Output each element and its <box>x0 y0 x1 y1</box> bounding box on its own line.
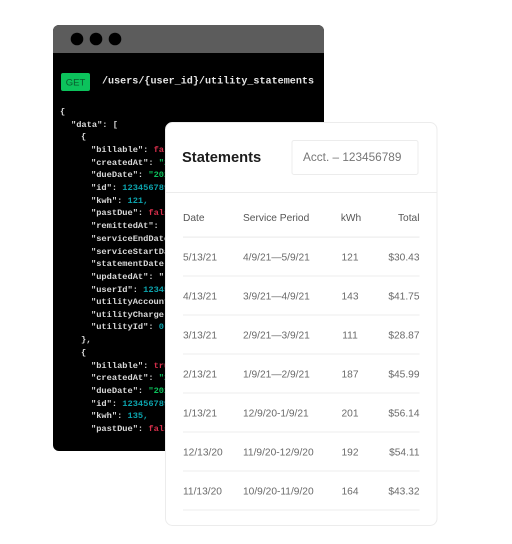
JSON code block: "dueDate": "2021 <box>91 386 174 396</box>
row 11/13/20: $43.32 <box>388 486 420 498</box>
row 11/13/20: 10/9/20-11/9/20 <box>243 486 314 498</box>
JSON code block: "dueDate": "2021 <box>91 170 174 180</box>
heading: Statements <box>182 150 261 166</box>
row 12/13/20: 12/13/20 <box>183 448 223 458</box>
row 12/13/20: $54.11 <box>389 448 420 458</box>
account number box <box>292 140 418 174</box>
JSON code block: "id": 123456789, <box>91 399 174 409</box>
table header: Total <box>398 213 420 224</box>
row 1/13/21: 1/13/21 <box>183 408 217 420</box>
row 3/13/21 <box>183 330 420 342</box>
row 3/13/21: $28.87 <box>388 330 420 342</box>
JSON code block: { <box>60 107 65 117</box>
JSON code block: { <box>81 132 86 142</box>
JSON code block: "utilityCharge": <box>91 310 174 320</box>
JSON code block: "createdAt": "2021 <box>91 158 185 168</box>
row 5/13/21: 121 <box>342 252 359 264</box>
row 1/13/21: 201 <box>342 408 359 420</box>
row 1/13/21: $56.14 <box>388 408 420 420</box>
row 4/13/21 <box>183 292 420 302</box>
row 4/13/21: 4/13/21 <box>183 292 217 302</box>
row 5/13/21: 4/9/21—5/9/21 <box>243 252 310 264</box>
JSON code block: "id": 123456789, <box>91 183 174 193</box>
row 1/13/21: 12/9/20-1/9/21 <box>243 408 309 420</box>
row 11/13/20: 164 <box>342 486 359 498</box>
JSON code block: "serviceStartDate": <box>91 247 190 257</box>
row 2/13/21: $45.99 <box>388 370 420 380</box>
JSON code block: "data": [ <box>71 120 118 130</box>
GET method badge <box>61 73 90 91</box>
JSON code block: "kwh": 135, <box>91 411 148 421</box>
JSON code block: "kwh": 121, <box>91 196 148 206</box>
row 2/13/21: 1/9/21—2/9/21 <box>243 370 310 380</box>
row 2/13/21: 187 <box>342 370 359 380</box>
JSON code block: "billable": false, <box>91 145 185 155</box>
table header: kWh <box>341 213 361 224</box>
row 4/13/21: 3/9/21—4/9/21 <box>243 292 310 302</box>
row 5/13/21 <box>183 252 420 264</box>
GET method badge: GET <box>66 78 85 88</box>
panel: API code window <box>53 25 324 451</box>
icon: window control dots <box>71 33 121 45</box>
JSON code block: }, <box>81 335 91 345</box>
row 3/13/21: 111 <box>342 330 358 342</box>
table header <box>183 213 420 224</box>
row 4/13/21: 143 <box>342 292 359 302</box>
window title bar <box>53 25 324 53</box>
table header: Date <box>183 213 205 224</box>
row 11/13/20 <box>183 486 420 498</box>
JSON code block: "updatedAt": " <box>91 272 164 282</box>
JSON code block: "billable": true, <box>91 361 180 371</box>
row 12/13/20 <box>183 448 420 458</box>
JSON code block: "remittedAt": " <box>91 221 169 231</box>
panel: statements card <box>166 122 437 526</box>
row 2/13/21: 2/13/21 <box>183 370 217 380</box>
JSON code block: "serviceEndDate": <box>91 234 180 244</box>
JSON code block: "createdAt": "2021 <box>91 373 185 383</box>
row 2/13/21 <box>183 370 420 380</box>
row 1/13/21 <box>183 408 420 420</box>
account number box: Acct. – 123456789 <box>303 150 401 164</box>
table header: Service Period <box>243 213 310 224</box>
row 3/13/21: 2/9/21—3/9/21 <box>243 330 310 342</box>
endpoint path: /users/{user_id}/utility_statements <box>102 76 314 88</box>
row 4/13/21: $41.75 <box>388 292 420 302</box>
row 3/13/21: 3/13/21 <box>183 330 217 342</box>
JSON code block: "utilityId": 0, <box>91 322 169 332</box>
JSON code block: "pastDue": false, <box>91 424 180 434</box>
row 12/13/20: 11/9/20-12/9/20 <box>243 448 314 458</box>
JSON code block: "pastDue": false, <box>91 208 180 218</box>
JSON code block: "userId": 123456 <box>91 285 174 295</box>
JSON code block: "utilityAccount": <box>91 297 180 307</box>
JSON code block: "statementDate": <box>91 259 174 269</box>
row 11/13/20: 11/13/20 <box>183 486 222 498</box>
JSON code block: { <box>81 348 86 358</box>
row 12/13/20: 192 <box>342 448 359 458</box>
statements table <box>183 213 420 510</box>
JSON code block <box>60 107 190 434</box>
row 5/13/21: $30.43 <box>388 252 420 264</box>
row 5/13/21: 5/13/21 <box>183 252 217 264</box>
